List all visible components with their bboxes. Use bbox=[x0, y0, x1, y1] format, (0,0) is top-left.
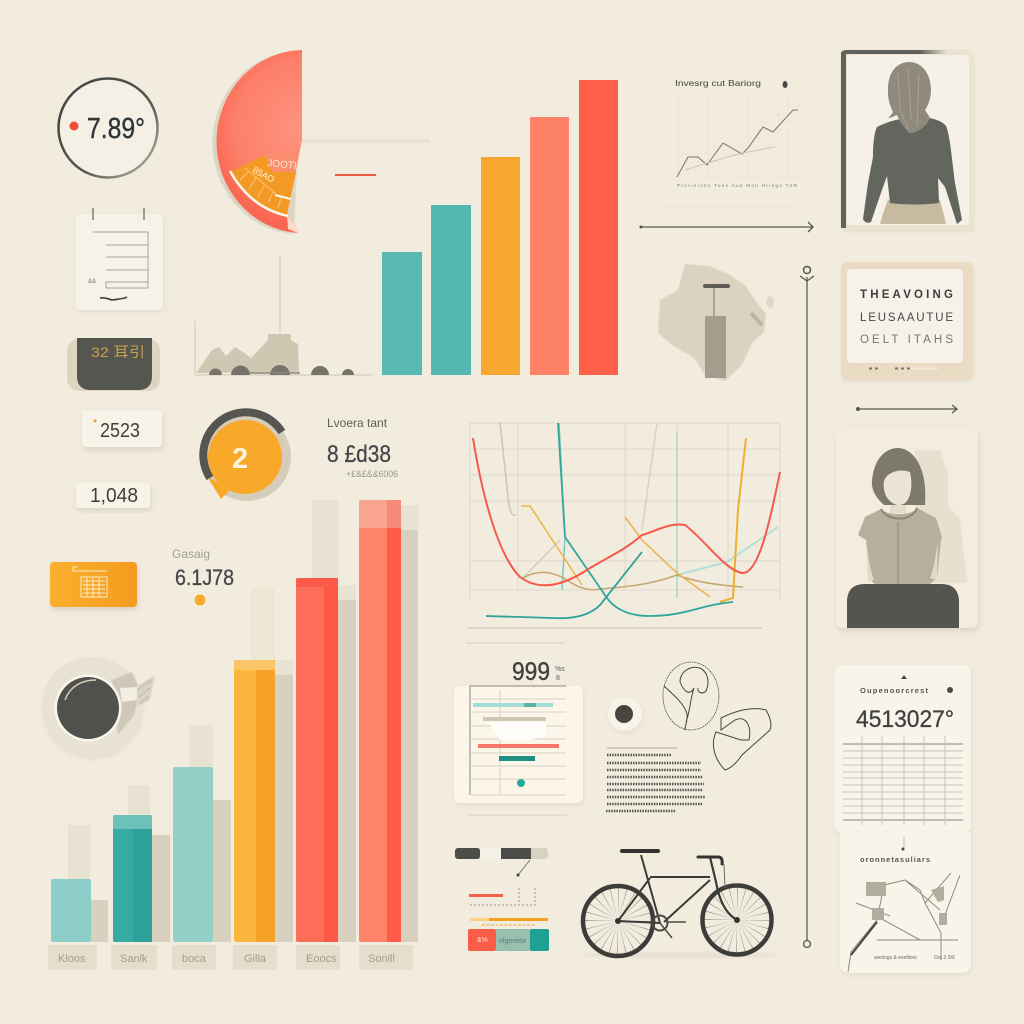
number card with table bbox=[835, 665, 971, 832]
line art shapes bbox=[663, 662, 771, 770]
stat card 1,048: 1,048 bbox=[90, 485, 138, 507]
number card with table: Oupenoorcrest bbox=[860, 686, 928, 695]
orange badge with number 2: 2 bbox=[232, 443, 248, 475]
stat 6.1J78: Gasaig bbox=[172, 547, 210, 561]
portrait card woman bbox=[836, 428, 978, 628]
arrow right lower bbox=[856, 405, 957, 413]
ink blob with gauge bar bbox=[658, 264, 774, 381]
big line chart bbox=[468, 422, 780, 628]
stat card 2523 bbox=[82, 410, 162, 447]
stat 6.1J78 bbox=[172, 547, 234, 606]
paragraph text block bbox=[606, 748, 705, 811]
dark dot button bbox=[608, 697, 642, 731]
dark card with gold text bbox=[67, 338, 160, 391]
bottom bar chart bbox=[48, 500, 418, 970]
circular gauge readout: 7.89° bbox=[87, 113, 145, 145]
number 999: 8 bbox=[556, 675, 560, 682]
semicircle pie chart bbox=[213, 50, 302, 234]
orange chip with table icon bbox=[50, 562, 137, 607]
note card with form lines: && bbox=[88, 279, 96, 285]
number card with table: 4513027° bbox=[856, 706, 954, 733]
orange badge with number 2 bbox=[203, 412, 291, 501]
portrait card back view bbox=[841, 50, 973, 230]
slider and small bars group bbox=[455, 848, 549, 951]
bottom bar chart: Gilla bbox=[244, 953, 267, 965]
slider and small bars group: elgeneta bbox=[499, 938, 526, 945]
decorative pie leader lines bbox=[302, 141, 430, 175]
number 999: %s bbox=[555, 666, 565, 673]
stat text block: +£&£&&6006 bbox=[346, 469, 398, 479]
mini table chart card bbox=[454, 686, 583, 815]
stat text block bbox=[327, 416, 398, 479]
stat card 2523: 2523 bbox=[100, 420, 140, 442]
circular gauge readout bbox=[58, 78, 158, 178]
bottom bar chart: Sanlk bbox=[120, 953, 148, 965]
map card: Ors 3 3IX bbox=[934, 955, 956, 961]
stat card 1,048 bbox=[76, 483, 150, 508]
text screen panel: THEAVOING bbox=[860, 289, 953, 301]
number 999 bbox=[466, 643, 565, 686]
bottom bar chart: Kloos bbox=[58, 953, 86, 965]
vertical timeline bbox=[800, 266, 814, 948]
stat text block: Lvoera tant bbox=[327, 416, 388, 430]
semicircle pie chart: 85AO bbox=[251, 165, 276, 185]
small silhouette area chart bbox=[195, 255, 372, 375]
small line chart bbox=[662, 78, 800, 206]
arrow right bbox=[640, 222, 813, 232]
small line chart: Invesrg cut Bariorg bbox=[675, 78, 761, 88]
number 999: 999 bbox=[512, 658, 550, 686]
text screen panel bbox=[841, 262, 973, 380]
semicircle pie chart: JOOTI bbox=[267, 158, 297, 172]
map card: oronnetasuliars bbox=[860, 855, 930, 864]
map card bbox=[840, 832, 971, 973]
bottom bar chart: boca bbox=[182, 953, 207, 965]
map card: weslogs & evetliors bbox=[874, 955, 917, 961]
stat 6.1J78: 6.1J78 bbox=[175, 565, 234, 590]
bottom bar chart: Eoocs bbox=[306, 953, 337, 965]
text screen panel: OELT ITAHS bbox=[860, 334, 953, 346]
dark card with gold text: 32 耳引 bbox=[91, 344, 145, 360]
small line chart: Provisions Tues Aus Mon Hrings TAR bbox=[677, 183, 798, 188]
bottom bar chart: Sonill bbox=[368, 953, 395, 965]
stat text block: 8 £d38 bbox=[327, 441, 391, 468]
bicycle bbox=[580, 851, 780, 958]
top bar chart bbox=[382, 80, 618, 375]
coffee cup bbox=[42, 657, 155, 757]
note card with form lines bbox=[76, 208, 163, 310]
text screen panel: LEUSAAUTUE bbox=[860, 312, 953, 324]
slider and small bars group: &% bbox=[477, 937, 488, 944]
